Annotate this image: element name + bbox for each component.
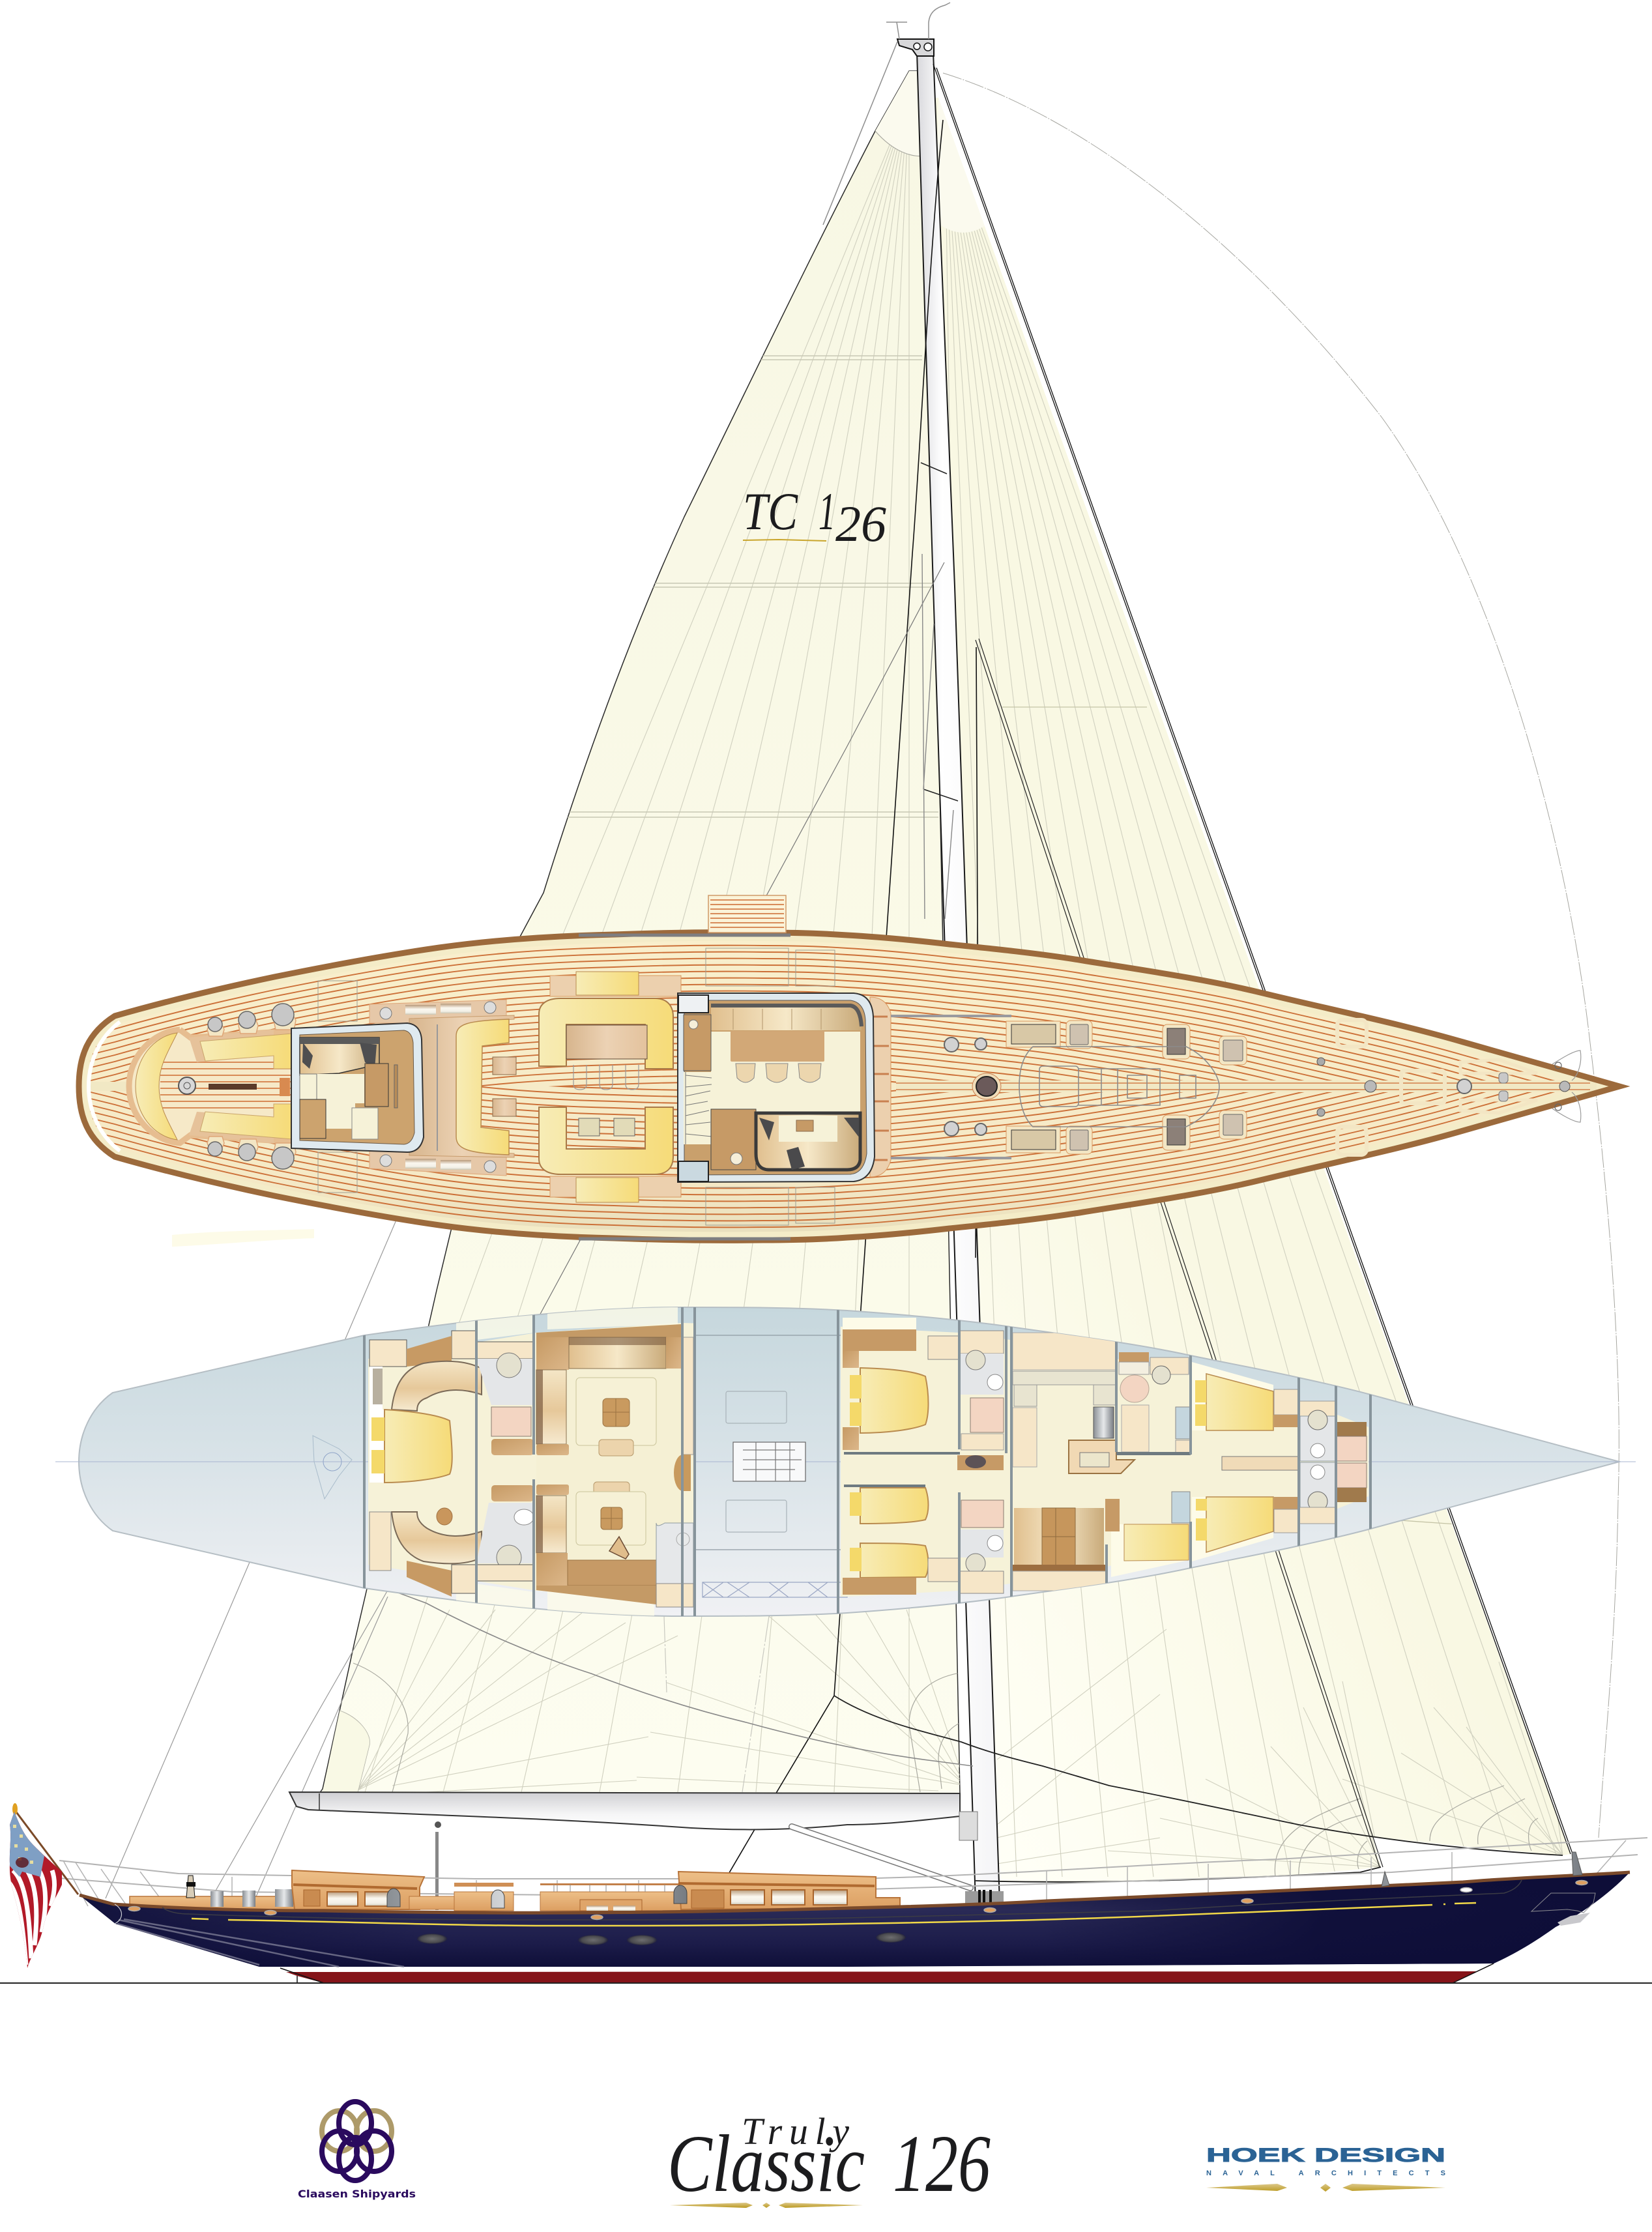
headsail with panel seams [933,98,1571,1882]
floor plan: hull outline [55,1307,1636,1616]
floor plan: aft cabins and saloon [368,1307,694,1616]
TC 126 sail insignia: TC [743,482,798,541]
logo: Truly Classic 126: Classic [667,2119,865,2209]
floor plan: engine room [696,1335,847,1597]
deck plan: foredeck winches and hatches [891,1016,1570,1158]
deck plan: main doghouse [678,993,891,1182]
side profile: deck cabins and fittings [130,1870,1004,1911]
deck plan: mast collar [972,1073,1001,1099]
deck plan: stern winches [207,1004,296,1169]
logo: Claasen Shipyards [298,2102,416,2200]
deck plan: main cockpit seating [539,972,681,1202]
deck plan: aft helm cockpit [129,1030,292,1143]
deck plan: mid deck with C-shaped seat [409,1015,516,1157]
mast with masthead crane [823,3,1619,1903]
deck plan: pale reflection [172,1229,314,1247]
boom [289,1792,978,1910]
deck plan: hull and planking [76,929,1630,1243]
logo: Hoek Design Naval Architects [1206,2145,1445,2192]
deck plan: ghosted skylights [318,948,835,1225]
TC 126 sail insignia: 1 [819,482,835,541]
logo: Truly Classic 126 [667,2110,991,2209]
logo: Truly Classic 126: 126 [893,2119,991,2209]
deck plan: bow anchor fittings [1552,1051,1581,1122]
rigging, spreaders and stays [106,64,1574,1909]
floor plan: guest cabins [841,1318,1372,1597]
TC 126 sail insignia: 26 [835,495,886,552]
logo: Hoek Design Naval Architects: HOEK DESIGN [1206,2145,1445,2166]
mainsail with panel seams [320,70,961,1793]
logo: Hoek Design Naval Architects: NAVAL ARCHITECTS [1206,2169,1445,2177]
side profile: lifelines [59,1838,1647,1909]
side profile: stern flag [7,1803,78,1971]
side profile: hull [80,1852,1630,1967]
deck plan: boarding platform [708,895,786,933]
deck plan: aft doghouse [291,1023,424,1152]
TC 126 sail insignia [743,482,886,552]
logo: Truly Classic 126: Truly [742,2110,849,2152]
deck plan: tender outline [1019,1047,1219,1127]
floor plan: bulkheads [364,1303,1370,1616]
deck plan: side panels with hatches [370,1000,506,1176]
side profile: red boot top and waterline [0,1964,1652,1983]
logo: Claasen Shipyards: Claasen Shipyards [298,2188,416,2200]
